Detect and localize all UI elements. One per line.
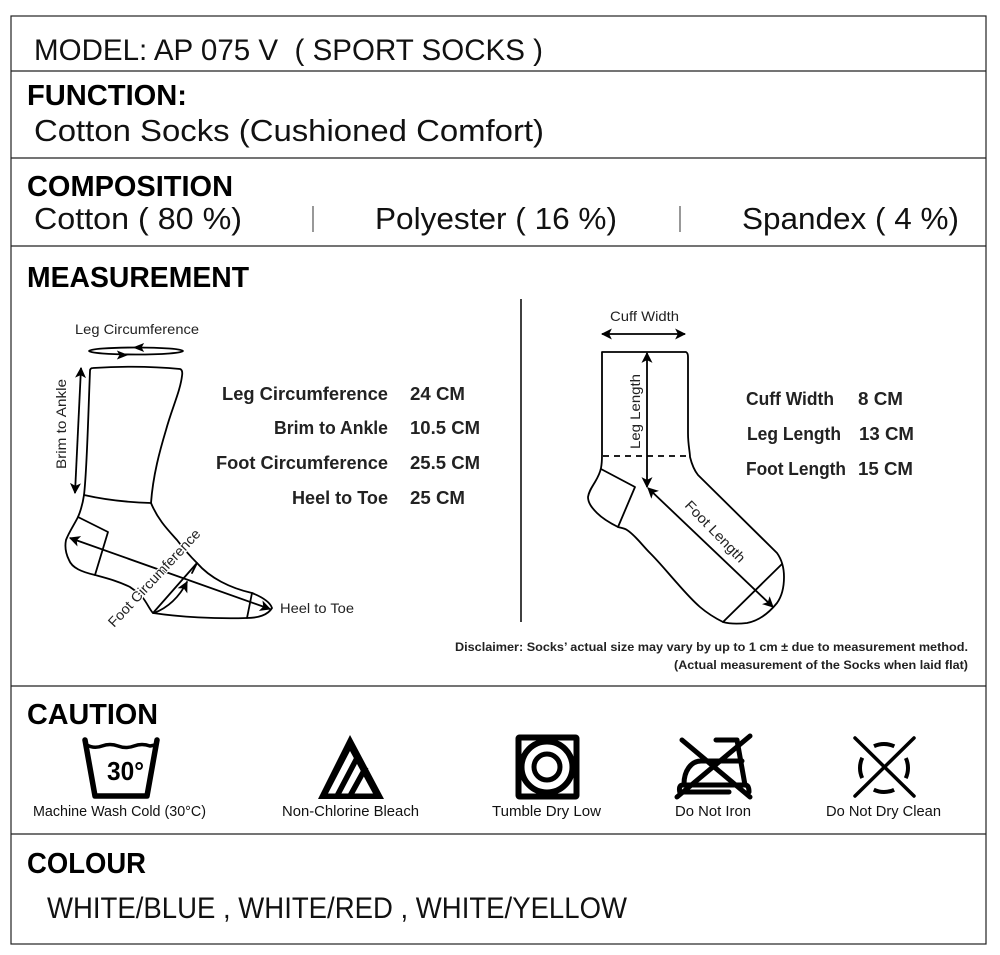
icon: tumble dry low xyxy=(518,738,576,796)
colour heading: COLOUR xyxy=(27,848,146,880)
spandex share: Spandex ( 4 %) xyxy=(742,201,959,236)
heel to toe value: Heel to Toe xyxy=(292,487,388,508)
disclaimer: Disclaimer: Socks’ actual size may vary by up to 1 cm ± due to measurement method. xyxy=(455,640,968,654)
sock outline side view xyxy=(65,367,272,618)
caution heading: CAUTION xyxy=(27,699,158,731)
measurement heading: MEASUREMENT xyxy=(27,262,249,294)
icon: machine wash 30 xyxy=(85,740,157,796)
heel to toe label: Heel to Toe xyxy=(280,600,354,616)
table: flat sock measurements xyxy=(746,388,914,479)
leg length arrow xyxy=(646,353,648,487)
panel: colour xyxy=(27,848,628,925)
diagram: side view sock xyxy=(53,321,354,630)
foot circumference value: 25.5 CM xyxy=(410,452,480,473)
foot circumference value: Foot Circumference xyxy=(216,452,388,473)
table: side view measurements xyxy=(216,383,480,508)
cuff width label: Cuff Width xyxy=(610,308,679,324)
polyester share: Polyester ( 16 %) xyxy=(375,201,617,236)
function description: Cotton Socks (Cushioned Comfort) xyxy=(34,113,544,148)
panel: measurement xyxy=(27,262,968,672)
diagram: flat sock xyxy=(588,308,784,624)
label: do not iron: Do Not Iron xyxy=(675,804,751,820)
foot length label: Foot Length xyxy=(682,497,749,566)
colour options: WHITE/BLUE , WHITE/RED , WHITE/YELLOW xyxy=(47,892,628,925)
model title: MODEL: AP 075 V ( SPORT SOCKS ) xyxy=(34,34,543,67)
disclaimer xyxy=(455,640,968,672)
foot length value: 15 CM xyxy=(858,458,913,479)
cuff width value xyxy=(746,388,903,409)
panel: caution xyxy=(27,699,941,820)
foot length value: Foot Length xyxy=(746,458,846,479)
brim to ankle value xyxy=(274,417,480,438)
composition heading: COMPOSITION xyxy=(27,171,233,203)
flat sock outline xyxy=(588,352,784,624)
cuff width value: Cuff Width xyxy=(746,388,834,409)
brim to ankle arrow xyxy=(75,368,81,493)
leg circumference value xyxy=(222,383,465,404)
foot circumference value xyxy=(216,452,480,473)
foot circumference loop xyxy=(153,563,197,613)
heel to toe value xyxy=(292,487,465,508)
leg and foot dashed divider xyxy=(603,455,690,457)
leg circumference value: Leg Circumference xyxy=(222,383,388,404)
panel: function xyxy=(27,80,544,148)
panel: composition xyxy=(27,171,959,236)
label: machine wash cold: Machine Wash Cold (30°C) xyxy=(33,804,206,820)
foot circumference arrow xyxy=(154,582,187,613)
icon: non-chlorine bleach xyxy=(318,735,384,799)
leg length value xyxy=(747,423,914,444)
cuff width arrow xyxy=(602,333,685,335)
leg circumference value: 24 CM xyxy=(410,383,465,404)
brim to ankle value: Brim to Ankle xyxy=(274,417,388,438)
brim to ankle value: 10.5 CM xyxy=(410,417,480,438)
leg circumference label: Leg Circumference xyxy=(75,321,199,337)
icon: do not dry clean xyxy=(855,738,914,796)
function heading: FUNCTION: xyxy=(27,80,187,112)
heel and toe seams xyxy=(601,469,782,622)
label: non-chlorine bleach: Non-Chlorine Bleach xyxy=(282,804,419,820)
foot length value xyxy=(746,458,913,479)
foot length arrow xyxy=(648,488,773,607)
leg circumference ellipse and arrows xyxy=(89,344,183,358)
disclaimer: (Actual measurement of the Socks when laid flat) xyxy=(674,658,968,672)
cuff width value: 8 CM xyxy=(858,388,903,409)
brim to ankle label: Brim to Ankle xyxy=(53,379,69,469)
foot circumference label: Foot Circumference xyxy=(104,525,204,630)
leg length value: Leg Length xyxy=(747,423,841,444)
leg length label: Leg Length xyxy=(627,374,643,449)
cotton share: Cotton ( 80 %) xyxy=(34,201,242,236)
label: do not dry clean: Do Not Dry Clean xyxy=(826,804,941,820)
ankle, heel and toe seams xyxy=(78,495,252,618)
heel to toe arrow xyxy=(70,538,270,609)
icon: machine wash 30: 30° xyxy=(107,756,144,786)
heel to toe value: 25 CM xyxy=(410,487,465,508)
icon: do not iron xyxy=(677,736,750,797)
label: tumble dry low: Tumble Dry Low xyxy=(492,804,602,820)
leg length value: 13 CM xyxy=(859,423,914,444)
